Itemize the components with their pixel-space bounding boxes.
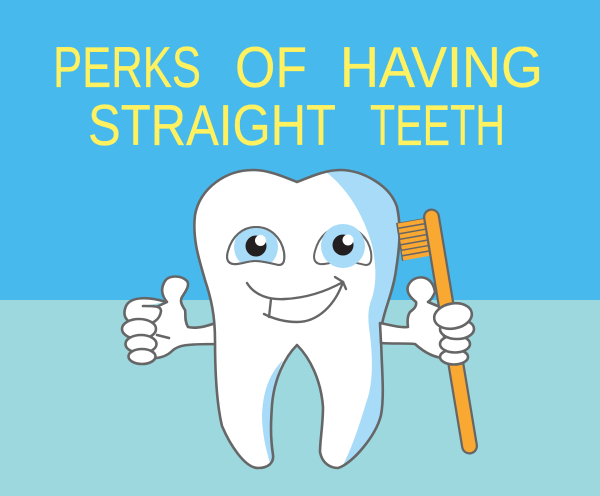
tooth shading: right side	[326, 170, 400, 467]
title: PERKS	[53, 36, 201, 100]
icon: toothbrush handle	[432, 217, 470, 446]
right eye	[314, 224, 371, 268]
tooth outline	[194, 170, 400, 468]
title: STRAIGHT	[88, 94, 336, 158]
tooth body	[194, 170, 400, 468]
background: sky blue wall	[0, 0, 600, 300]
tooth shading: inner root	[262, 360, 283, 463]
title: OF	[235, 36, 307, 100]
icon: left thumbs-up hand	[122, 276, 218, 364]
title: TEETH	[370, 94, 505, 158]
title: HAVING	[340, 36, 543, 100]
right hand fingers	[432, 300, 474, 364]
title	[53, 36, 543, 158]
smile	[247, 277, 346, 322]
left eye	[227, 225, 284, 269]
left hand fingers	[122, 298, 169, 364]
icon: toothbrush bristles	[396, 218, 431, 261]
icon: right hand palm and thumb	[380, 277, 450, 358]
background: teal floor	[0, 300, 600, 496]
